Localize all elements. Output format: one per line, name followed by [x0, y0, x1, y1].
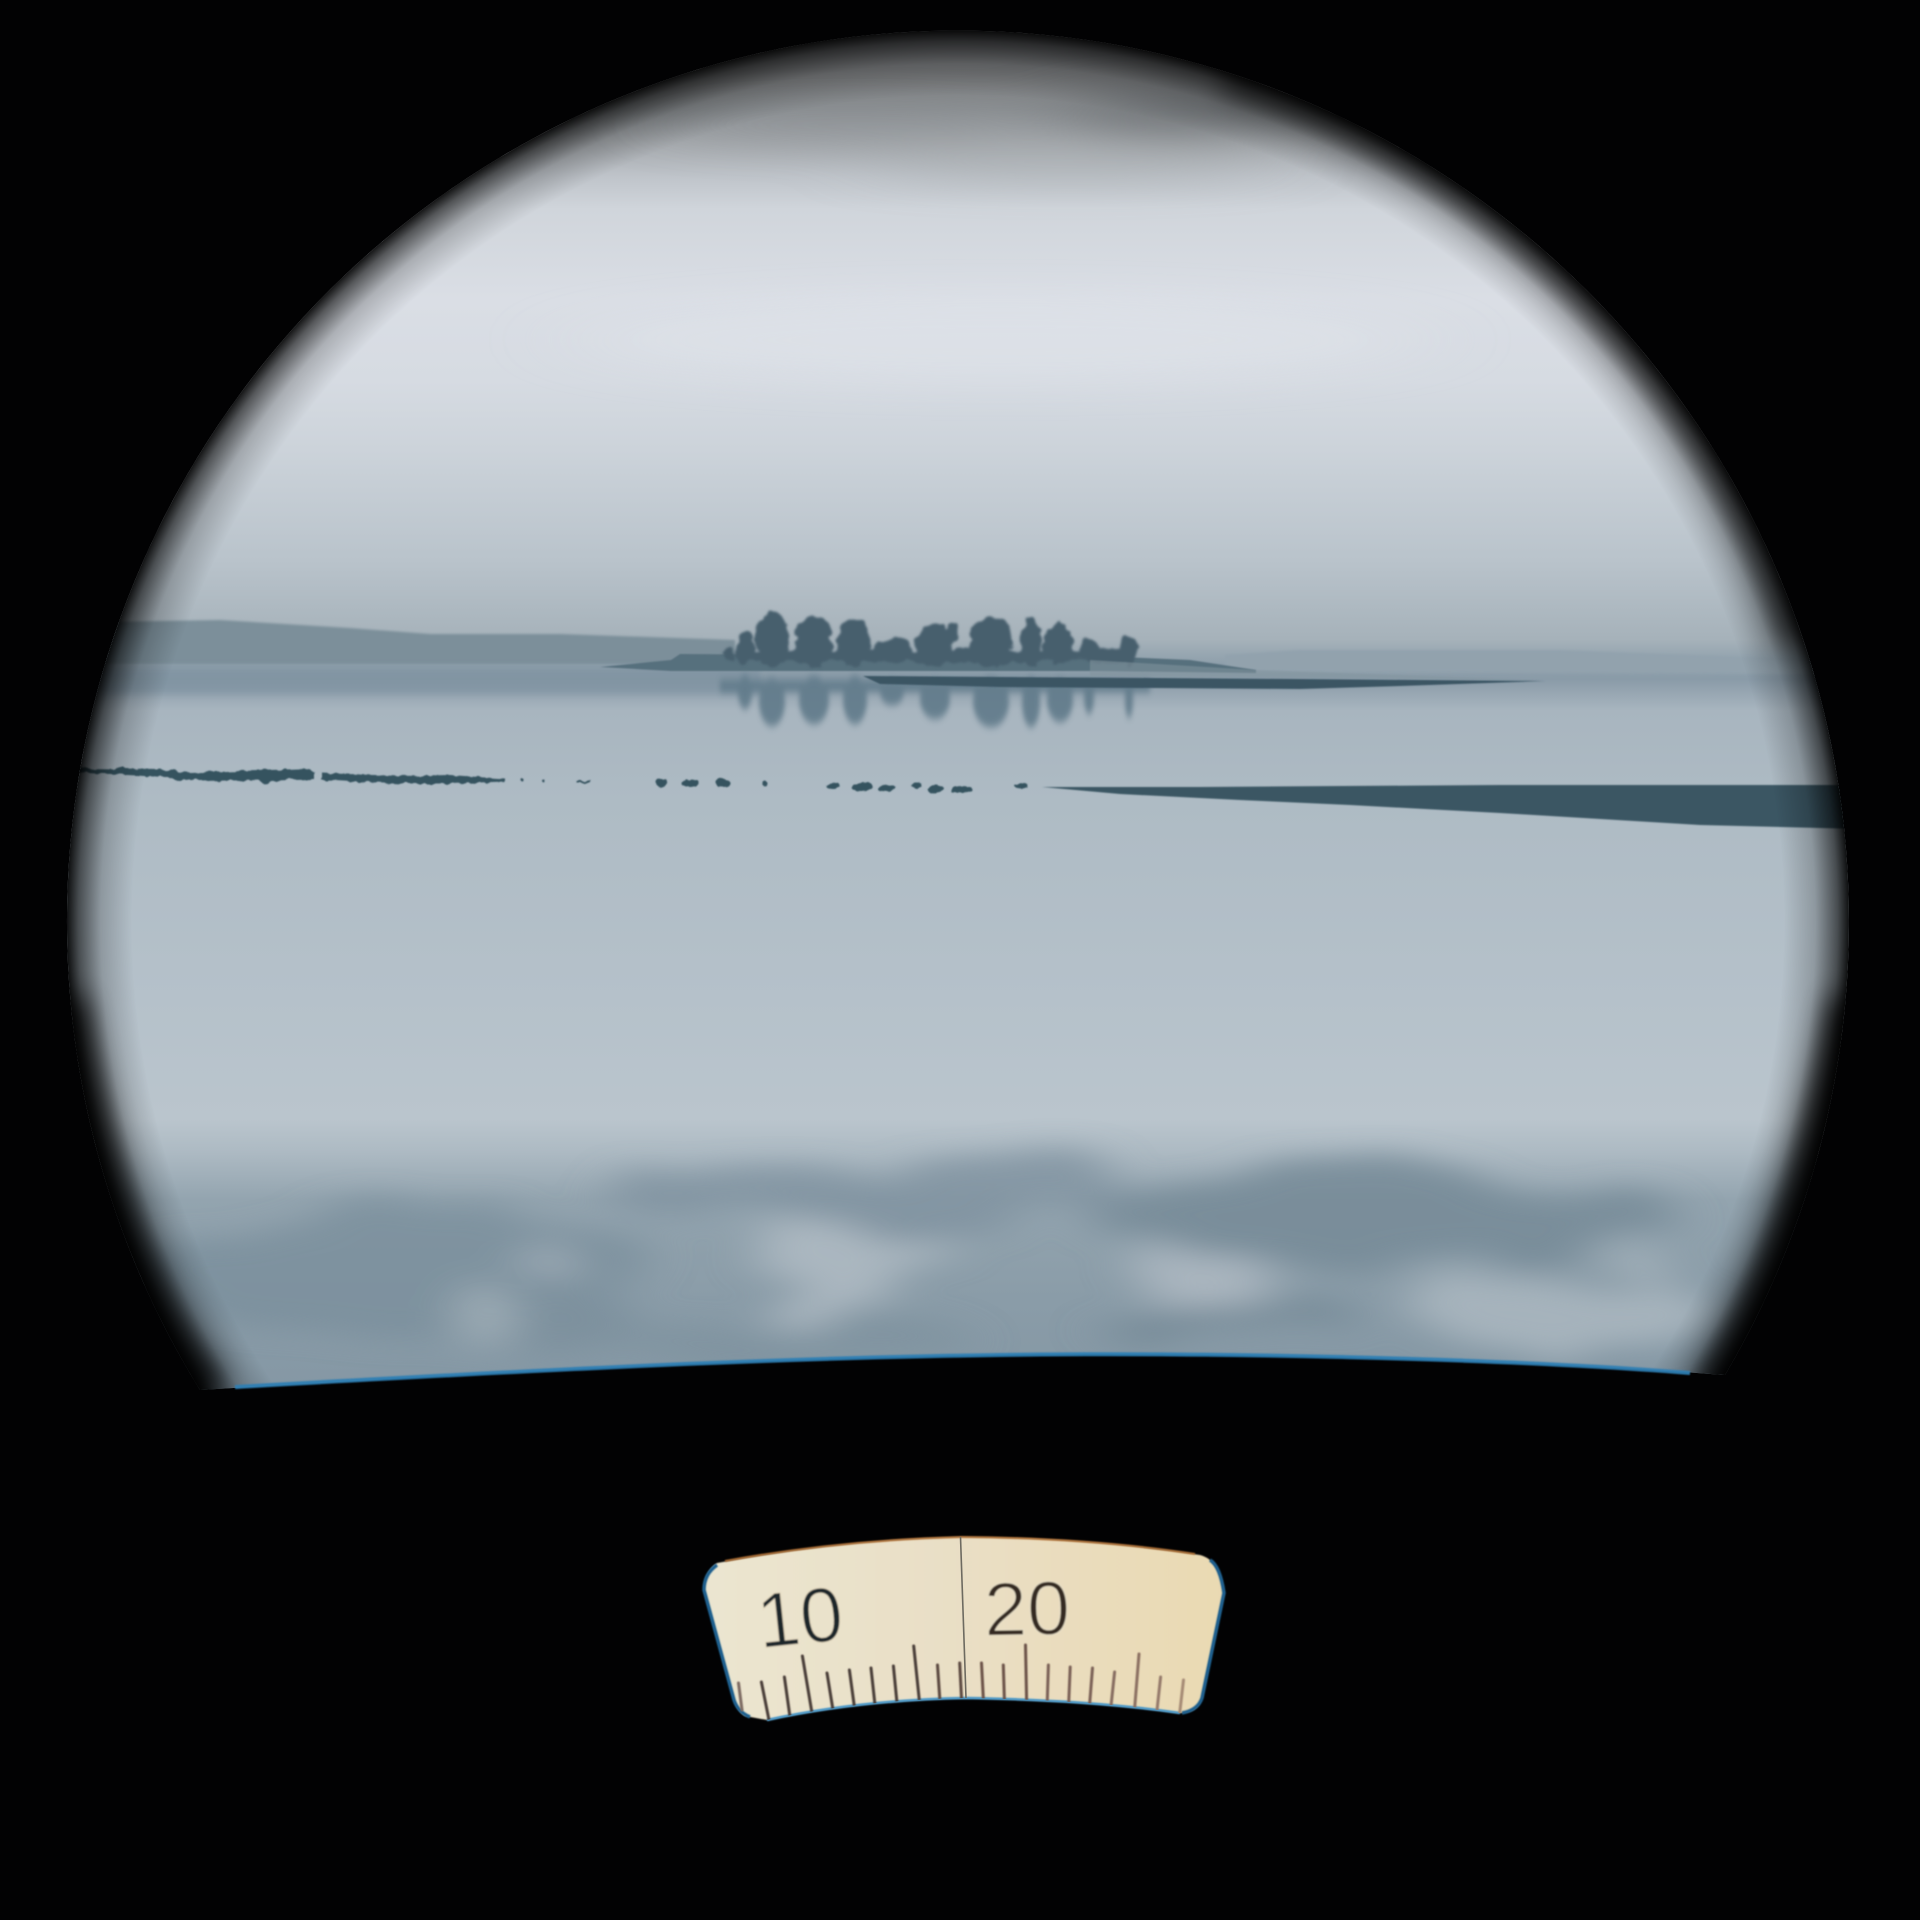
- scale ticks: [738, 1645, 1184, 1720]
- lens vignette: [67, 30, 1849, 1390]
- shoreline reflection band: [100, 668, 760, 694]
- blue lower edge of aperture: [235, 1354, 1690, 1387]
- index line: [960, 1537, 966, 1698]
- tidal bar behind island: [863, 676, 1545, 689]
- tree reflections: [720, 675, 1150, 727]
- scale number 10: 10: [753, 1569, 847, 1665]
- aperture view of the lake: [66, 30, 1849, 1390]
- blue bottom rim: [767, 1698, 1180, 1720]
- island trees: [723, 613, 1138, 668]
- scale number 20: 20: [983, 1566, 1071, 1653]
- sand spit on the right: [1042, 785, 1860, 829]
- sky and water base: [66, 30, 1849, 1390]
- clouds in the sky: [978, 91, 1287, 180]
- rock line in the water: [79, 768, 1028, 794]
- low sandbar behind the trees: [600, 654, 1256, 673]
- plate face: [704, 1537, 1224, 1720]
- far shoreline left: [100, 620, 735, 664]
- orange top rim: [725, 1537, 1195, 1561]
- scale plate: [704, 1537, 1224, 1720]
- cloud reflections on the water: [150, 1159, 1690, 1356]
- blue side fringes: [704, 1560, 1224, 1717]
- far shoreline right: [1810, 660, 1814, 674]
